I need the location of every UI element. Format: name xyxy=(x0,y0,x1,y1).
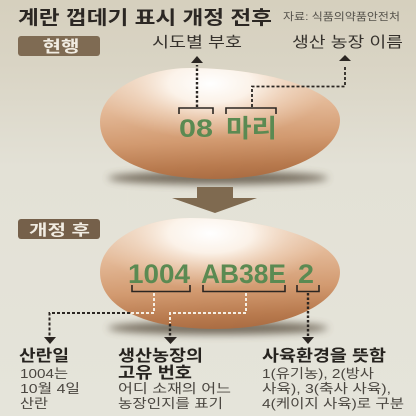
text block: environment: 4(케이지 사육)로 구분 xyxy=(262,396,404,411)
title: 계란 껍데기 표시 개정 전후 xyxy=(18,7,272,29)
text block: farm id: 생산농장의 xyxy=(118,347,203,365)
bracket: environment xyxy=(297,285,319,292)
text block: farm id: 농장인지를 표기 xyxy=(118,396,223,411)
revised code text: 1004 xyxy=(128,259,190,289)
text block: environment xyxy=(262,347,404,411)
arrow: farm name xyxy=(252,55,351,107)
bracket: farm id xyxy=(203,285,285,292)
text block: lay date: 10월 4일 xyxy=(20,381,80,396)
current code text: 08 xyxy=(179,115,213,143)
label: farm name: 생산 농장 이름 xyxy=(292,34,403,51)
revised code text: AB38E xyxy=(201,259,286,289)
badge: revised: 개정 후 xyxy=(29,222,90,239)
bracket: lay date xyxy=(132,285,190,292)
revised code text xyxy=(128,259,314,289)
text block: lay date: 1004는 xyxy=(20,366,68,381)
arrow: region code xyxy=(191,56,203,107)
revised code text: 2 xyxy=(298,259,314,289)
shadow: first egg xyxy=(108,172,328,184)
text block: environment: 1(유기농), 2(방사 xyxy=(262,366,374,381)
bracket: farm name xyxy=(226,108,276,114)
badge: current xyxy=(18,36,100,56)
text block: environment: 사육환경을 뜻함 xyxy=(262,347,386,365)
text block: lay date xyxy=(19,347,80,411)
text block: lay date: 산란일 xyxy=(19,347,69,365)
arrow: environment xyxy=(302,293,314,344)
text block: environment: 사육), 3(축사 사육), xyxy=(262,381,391,396)
text block: farm id: 고유 번호 xyxy=(118,364,192,382)
badge: revised xyxy=(18,219,100,239)
shadow: second egg xyxy=(108,322,328,334)
egg: revised xyxy=(100,218,340,329)
text block: farm id: 어디 소재의 어느 xyxy=(118,381,231,396)
bracket: region code xyxy=(179,108,213,114)
current code text: 마리 xyxy=(226,115,277,143)
label: region code: 시도별 부호 xyxy=(152,34,242,51)
source note: 자료: 식품의약품안전처 xyxy=(283,11,400,23)
arrow: lay date xyxy=(44,293,154,344)
current code text xyxy=(179,115,277,143)
text block: lay date: 산란 xyxy=(20,396,48,411)
arrow: farm id xyxy=(164,293,246,344)
badge: current: 현행 xyxy=(42,37,80,56)
text block: farm id xyxy=(118,347,231,411)
egg: current xyxy=(100,68,340,179)
transition arrow xyxy=(172,187,257,213)
